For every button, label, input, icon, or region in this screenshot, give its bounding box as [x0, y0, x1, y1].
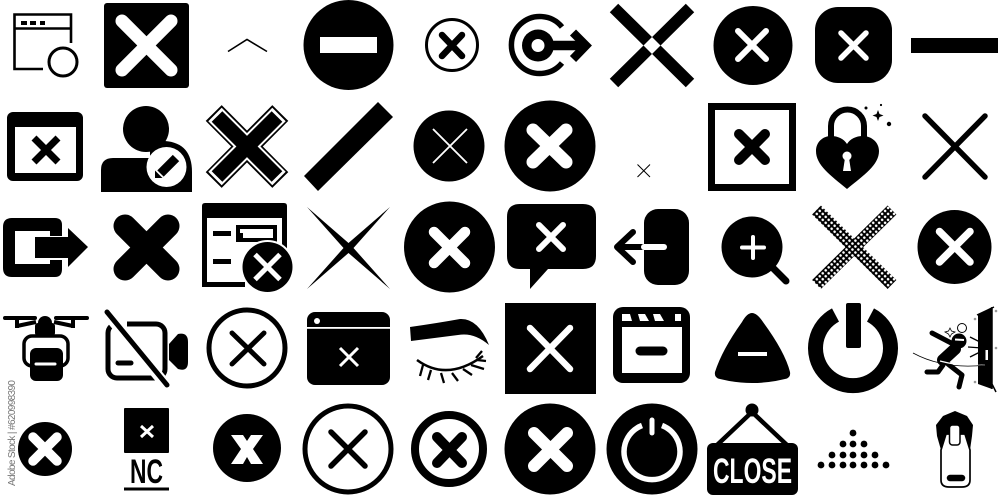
icon: magnifier plus — [722, 216, 786, 281]
icon: circle with white X — [918, 210, 992, 284]
icon: power symbol — [815, 303, 890, 386]
icon: circle with bold X — [504, 100, 596, 192]
icon: circle with power symbol — [606, 404, 698, 494]
icon: form window with close badge — [202, 203, 294, 294]
icon: app window with small X — [307, 312, 390, 385]
icon: dot triangle — [818, 430, 889, 468]
icon: outlined square with X — [712, 106, 792, 188]
icon: hanging close sign — [707, 404, 798, 495]
icon: bold rounded X — [125, 226, 168, 269]
watermark: stock id: Adobe Stock | #620998390 — [7, 380, 18, 486]
icon: door exit left arrow — [617, 209, 689, 285]
icon: speech bubble with X — [507, 204, 596, 289]
icon: ring with bold X — [426, 20, 478, 70]
icon: circle with rounded X — [404, 202, 495, 292]
icon: target exit arrow — [511, 16, 586, 74]
icon: circle with slab X — [213, 414, 281, 482]
icon: zipper pull — [936, 411, 973, 487]
icon: clapper window with minus — [613, 307, 690, 383]
icon: user with pencil — [101, 106, 192, 192]
icon: video camera off — [104, 310, 188, 390]
icon: sharp tapered X — [307, 207, 390, 289]
icon: large X with diamond centre — [614, 8, 690, 83]
icon: circle with hairline X — [414, 110, 484, 182]
icon: exit bracket with arrow — [3, 218, 88, 277]
icon: no entry minus circle — [304, 0, 394, 90]
icon: large circle with X — [504, 404, 596, 494]
icon: chevron up — [228, 40, 267, 52]
icon: closed eye with eyebrow — [410, 319, 489, 383]
icon: minus bar — [911, 38, 998, 53]
icon: black square with thin X — [505, 303, 596, 394]
icon: hanging close sign: CLOSE — [713, 452, 792, 491]
icon: NC label with X square: NC — [130, 453, 163, 491]
icon: large ring with X — [305, 406, 391, 492]
icon: delivery drone with package — [5, 316, 87, 381]
icon: circle with thin white X — [714, 6, 792, 85]
icon: thick ring with bold X — [415, 415, 483, 483]
icon: diagonal bar — [304, 102, 393, 191]
icon: rounded triangle minus — [715, 313, 790, 383]
icon: tiny X — [638, 164, 650, 177]
icon: small circle with X — [18, 422, 72, 476]
icon: outlined X — [214, 113, 280, 180]
icon: plain X — [925, 116, 985, 177]
icon: heart padlock with sparkles — [816, 104, 891, 189]
icon: person running into door — [913, 307, 997, 392]
icon: NC label with X square — [124, 408, 169, 491]
icon: app window with X — [7, 112, 83, 181]
icon: rounded square with X — [815, 7, 892, 83]
icon: ring with X — [209, 310, 285, 386]
icon: black square with white X — [104, 3, 189, 88]
icon: mesh X — [816, 210, 892, 284]
icon: browser window with circle — [14, 14, 77, 76]
